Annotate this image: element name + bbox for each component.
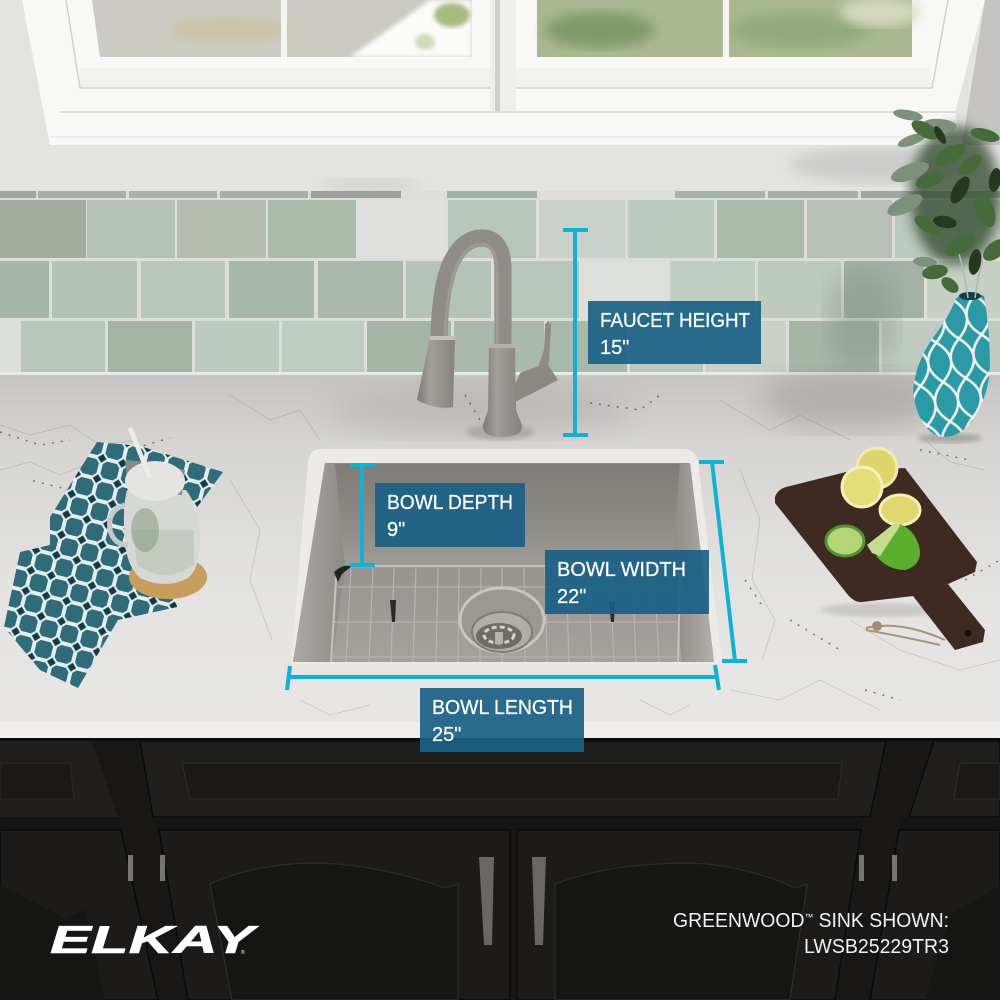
grid feet: [390, 600, 396, 622]
caption: sink model: SINK SHOWN:: [813, 910, 949, 932]
faucet: [417, 238, 558, 440]
dimension: bowl width: [545, 462, 747, 661]
label: bowl length: BOWL LENGTH: [432, 697, 573, 719]
window pane: right: [537, 0, 920, 57]
window pane: left: [92, 0, 472, 57]
cabinet door: far right: [870, 830, 1000, 1000]
vase: [913, 292, 990, 443]
label: faucet height: FAUCET HEIGHT: [600, 310, 750, 332]
tile backsplash: [0, 191, 1000, 380]
cabinet door: center left: [159, 830, 510, 1000]
dimension: bowl length: [287, 665, 719, 752]
drawer: left: [0, 741, 118, 817]
sink grid: [331, 566, 680, 662]
logo: Elkay: ®: [241, 949, 245, 956]
label: faucet height: 15": [600, 337, 629, 359]
label: bowl width: 22": [557, 586, 586, 608]
cabinet door: far left: [0, 830, 158, 1000]
label: faucet height: [588, 301, 761, 364]
marble veins: [0, 395, 1000, 715]
countertop: [0, 370, 1000, 740]
drawer: right: [909, 741, 1000, 817]
cabinets: [0, 738, 1000, 1000]
label: bowl length: [420, 688, 584, 752]
caption: sink model: LWSB25229TR3: [804, 936, 949, 958]
plant: [884, 107, 1000, 298]
mason jar on coaster: [110, 428, 207, 599]
label: bowl depth: [375, 483, 525, 547]
caption: sink model: GREENWOOD: [673, 910, 809, 932]
label: bowl width: BOWL WIDTH: [557, 559, 686, 581]
cabinet door: center right: [517, 830, 861, 1000]
label: bowl width: [545, 550, 709, 614]
label: bowl depth: 9": [387, 519, 405, 541]
caption: sink model: [673, 910, 949, 958]
cutting board with limes and lemons: [775, 448, 985, 650]
window frame: [22, 0, 985, 145]
sink bowl: [291, 449, 722, 664]
door handles: [128, 855, 897, 945]
logo: Elkay: [50, 919, 259, 962]
label: bowl length: 25": [432, 724, 461, 746]
dimension: bowl depth: [350, 465, 525, 565]
label: bowl depth: BOWL DEPTH: [387, 492, 513, 514]
towel: [4, 442, 223, 688]
drain strainer: [460, 588, 544, 652]
logo: Elkay: ELKAY: [50, 919, 259, 962]
drawer: center: [140, 741, 886, 817]
dimension: faucet height: [563, 230, 761, 435]
window and wall: [0, 0, 1000, 192]
caption: sink model: ™: [804, 912, 813, 922]
